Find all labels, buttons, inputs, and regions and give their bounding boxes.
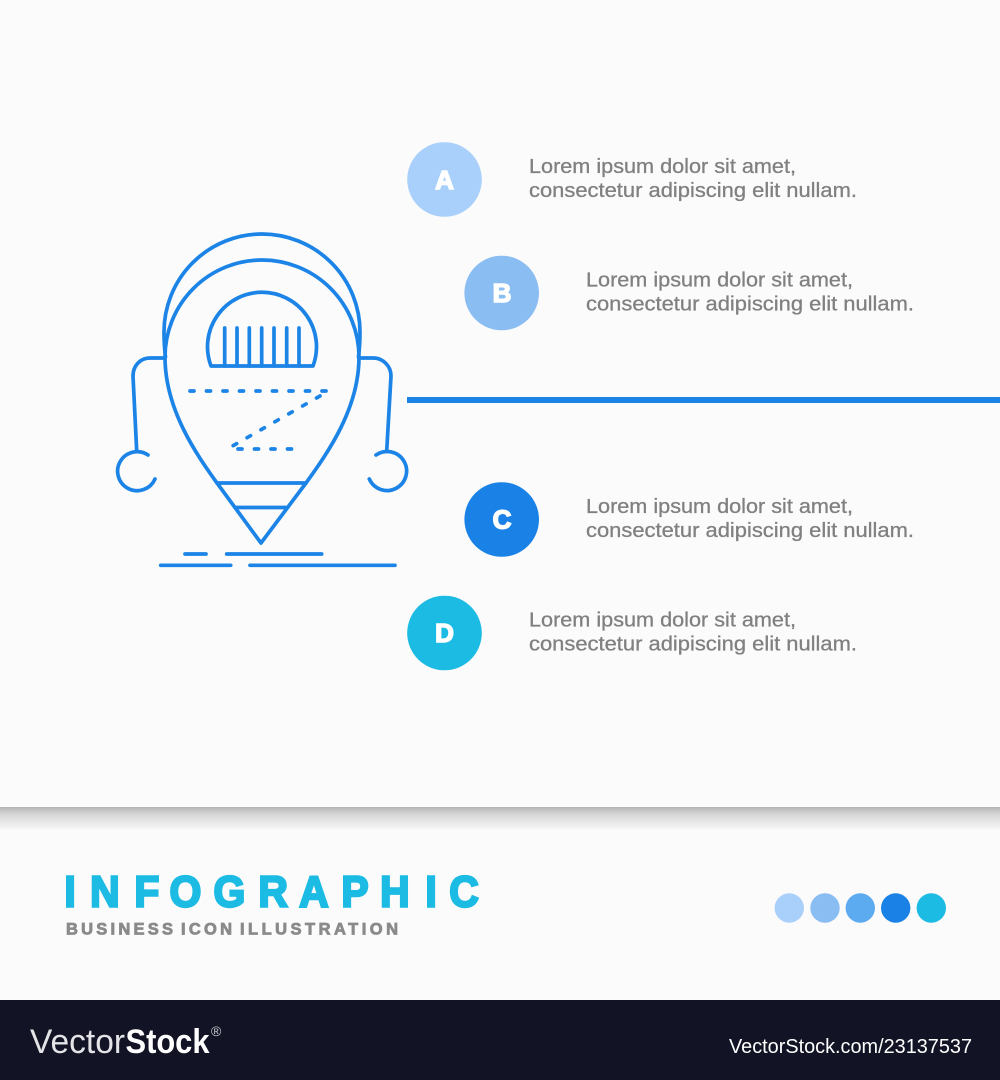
text C: Lorem ipsum dolor sit amet,: [586, 495, 853, 518]
visor bars: [225, 328, 299, 366]
dashed diagonal: [229, 396, 320, 448]
dashed face lines: [190, 389, 327, 393]
badge B: [464, 256, 539, 330]
icon: robot map pin: [118, 234, 407, 565]
panel shadow divider: [0, 807, 1000, 831]
text A: consectetur adipiscing elit nullam.: [529, 179, 857, 202]
text C: consectetur adipiscing elit nullam.: [586, 519, 914, 542]
text A: Lorem ipsum dolor sit amet,: [529, 155, 796, 178]
badge letter B: B: [493, 278, 511, 308]
outer head arc: [164, 234, 360, 357]
text D: Lorem ipsum dolor sit amet,: [529, 608, 796, 632]
footer logo: Vector: [30, 1023, 125, 1061]
badge letter A: A: [435, 165, 454, 195]
footer bar: [0, 1000, 1000, 1080]
ground lines: [161, 554, 395, 565]
item B: [464, 256, 914, 330]
visor dome: [207, 292, 316, 366]
text B: Lorem ipsum dolor sit amet,: [586, 268, 853, 292]
pin body: [165, 260, 359, 543]
subheading: ICON: [181, 921, 232, 939]
subheading: ILLUSTRATION: [240, 921, 398, 939]
item A: [407, 142, 857, 217]
subheading: BUSINESS: [66, 921, 173, 939]
timeline bar: [407, 397, 1000, 403]
colour dots legend: [775, 893, 946, 923]
footer image id: VectorStock.com/23137537: [729, 1035, 972, 1058]
left arm: [118, 358, 164, 491]
badge A: [407, 142, 482, 217]
badge letter D: D: [435, 618, 454, 648]
badge D: [407, 596, 482, 670]
footer logo: ®: [211, 1023, 222, 1039]
subheading: [66, 921, 398, 939]
text B: consectetur adipiscing elit nullam.: [586, 292, 914, 316]
right arm: [360, 358, 407, 491]
text D: consectetur adipiscing elit nullam.: [529, 632, 857, 656]
badge letter C: C: [493, 504, 512, 534]
dashed lower line: [238, 447, 292, 451]
pin tip bands: [217, 483, 306, 508]
badge C: [464, 482, 539, 557]
item D: [407, 596, 857, 670]
item C: [464, 482, 914, 557]
footer logo: Stock: [126, 1023, 210, 1061]
heading: INFOGRAPHIC: INFOGRAPHIC: [64, 868, 479, 917]
